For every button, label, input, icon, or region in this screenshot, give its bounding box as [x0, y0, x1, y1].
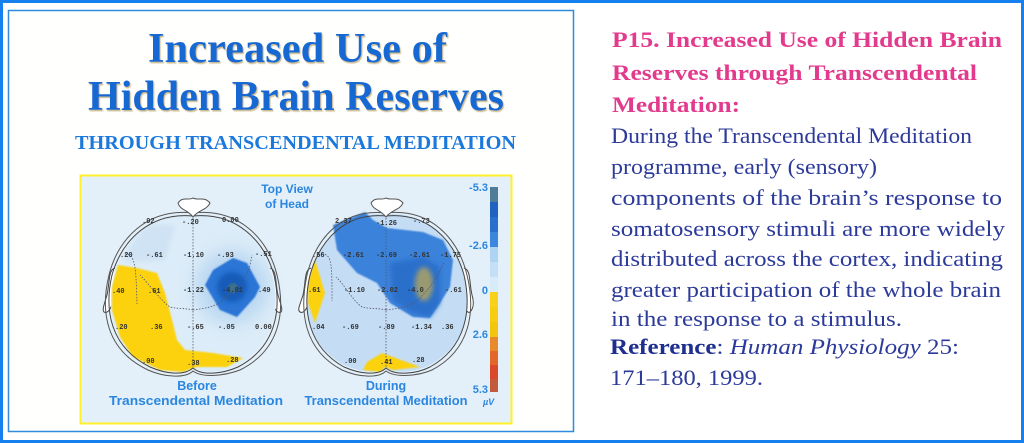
electrode values: -1.10 [183, 252, 204, 260]
electrode values: -4.0 [407, 287, 424, 295]
electrode values: -2.61 [409, 252, 430, 260]
electrode values: .36 [150, 324, 163, 332]
electrode values: 0.00 [222, 217, 239, 225]
electrode values: .41 [380, 359, 393, 367]
text block: heading: P15. Increased Use of Hidden Brain [612, 27, 1003, 52]
skull outline [307, 216, 467, 373]
legend: microvolt colour scale: -5.3 [469, 182, 488, 194]
text block: description: During the Transcendental Meditation [611, 123, 972, 148]
chart: during head map [299, 198, 473, 376]
text block: description: in the response to a stimulus. [611, 306, 902, 331]
sulci lines [125, 218, 252, 368]
caption: before: Before [177, 379, 217, 393]
panel: slide [8, 10, 574, 432]
electrode values: -1.34 [411, 324, 432, 332]
electrode values: -.93 [217, 252, 234, 260]
title: Hidden Brain Reserves [88, 74, 504, 120]
text block: description: somatosensory stimuli are more widely [611, 216, 1006, 241]
electrode values: -1.22 [183, 287, 204, 295]
ears [103, 268, 282, 312]
electrode values: .28 [226, 357, 239, 365]
electrode values: .40 [112, 288, 125, 296]
text block: description [611, 123, 1006, 331]
caption: during: Transcendental Meditation [304, 394, 468, 408]
electrode values: .00 [142, 358, 155, 366]
heading: top view of head: of Head [265, 197, 309, 211]
electrode values: .36 [441, 324, 454, 332]
text block: heading: Reserves through Transcendental [612, 60, 977, 85]
electrode values: -1.10 [344, 287, 365, 295]
electrode values: -2.02 [377, 287, 398, 295]
text block: reference: Reference : Human Physiology 25: [610, 334, 959, 359]
legend: microvolt colour scale: -2.6 [469, 240, 488, 252]
text block: heading: Meditation: [612, 92, 740, 117]
electrode values: .28 [412, 357, 425, 365]
electrode values: .04 [312, 324, 325, 332]
electrode values: .61 [308, 287, 321, 295]
electrode values: -.51 [255, 251, 272, 259]
electrode values: -2.69 [376, 252, 397, 260]
legend: microvolt colour scale: 5.3 [473, 384, 488, 396]
text block: description: greater participation of the whole brain [611, 277, 1001, 302]
electrode values: -.89 [378, 324, 395, 332]
legend: microvolt colour scale: µV [482, 397, 495, 407]
text block: heading [612, 27, 1003, 117]
subtitle: THROUGH TRANSCENDENTAL MEDITATION [75, 133, 516, 154]
electrode values: -1.26 [376, 220, 397, 228]
legend: microvolt colour scale: 0 [482, 285, 488, 297]
electrode values: .92 [142, 218, 155, 226]
text block: description: components of the brain’s response to [611, 185, 1002, 210]
title [88, 26, 504, 120]
electrode values: -1.75 [440, 252, 461, 260]
electrode values: -.73 [413, 218, 430, 226]
text block: description: distributed across the cortex, indicating [611, 246, 1003, 271]
electrode values: -.20 [182, 219, 199, 227]
legend: microvolt colour scale [469, 182, 498, 407]
text block: description: programme, early (sensory) [611, 154, 877, 179]
chart: before head map [103, 198, 282, 376]
electrode values: -.65 [187, 324, 204, 332]
electrode values: .20 [115, 324, 128, 332]
electrode values: .49 [258, 287, 271, 295]
electrode values: -2.61 [343, 252, 364, 260]
text block: reference [610, 334, 959, 390]
caption: before: Transcendental Meditation [109, 394, 283, 408]
electrode values: -.69 [342, 324, 359, 332]
electrode values: .20 [120, 252, 133, 260]
electrode values: -.05 [218, 324, 235, 332]
caption: during: During [366, 379, 406, 393]
skull outline [109, 216, 277, 373]
electrode values [112, 217, 272, 368]
heading: top view of head: Top View [261, 182, 313, 196]
electrode values: -.61 [146, 252, 163, 260]
legend: microvolt colour scale: 2.6 [473, 329, 488, 341]
electrode values: .00 [344, 358, 357, 366]
text block: reference: 171–180, 1999. [610, 365, 763, 390]
ears [299, 268, 473, 312]
electrode values: .38 [187, 360, 200, 368]
electrode values [308, 218, 462, 367]
title: Increased Use of [148, 26, 448, 72]
panel: brain maps [80, 176, 512, 424]
electrode values: -4.81 [222, 287, 243, 295]
electrode values: .56 [312, 252, 325, 260]
sulci lines [322, 218, 444, 368]
electrode values: 0.00 [255, 324, 272, 332]
electrode values: 2.37 [335, 218, 352, 226]
electrode values: -.61 [445, 287, 462, 295]
electrode values: .61 [148, 288, 161, 296]
